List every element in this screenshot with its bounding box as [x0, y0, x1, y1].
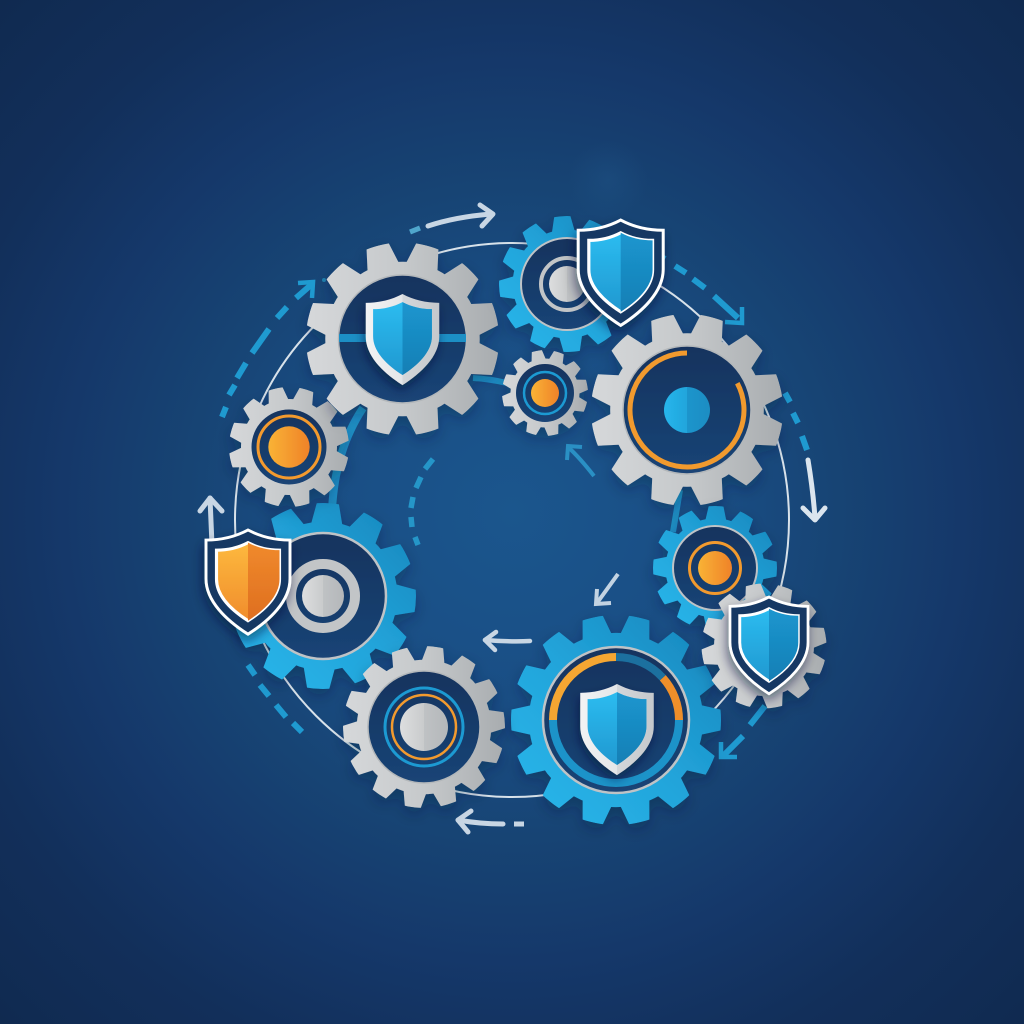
shield frame — [366, 294, 439, 385]
blue segment bottom — [553, 720, 679, 783]
silver ring — [541, 258, 593, 310]
connector arcs between gears — [332, 378, 680, 532]
shield outline — [206, 530, 290, 634]
gear teeth — [498, 216, 612, 359]
arrow: top clockwise — [410, 205, 493, 232]
thin orbit ring — [235, 243, 789, 797]
shield face — [588, 692, 646, 765]
orange disc — [531, 379, 559, 407]
orange disc — [268, 426, 310, 468]
shield: orange on left blue gear — [206, 530, 290, 634]
background glow — [568, 140, 648, 220]
orange segment left — [553, 657, 616, 720]
arrow: upper right dashed — [660, 256, 742, 323]
centre disc — [549, 266, 585, 302]
connector: right gear to right blue gear — [673, 490, 680, 532]
shield face — [216, 543, 280, 621]
connector: top gear to small gear — [473, 378, 507, 383]
shield: lower-right gray gear — [730, 597, 808, 694]
shield face — [740, 609, 798, 681]
arrow: right side downward — [785, 393, 825, 520]
gear hub — [516, 364, 574, 422]
gear: right large gray gear — [591, 314, 783, 506]
blue ring — [524, 372, 566, 414]
gear hub — [521, 238, 613, 330]
gear teeth — [343, 646, 505, 808]
centre disc — [400, 703, 448, 751]
shield: bottom blue gear — [580, 684, 654, 775]
silver ring — [291, 564, 355, 628]
arrow: left upward — [200, 498, 222, 545]
gear: right blue gear — [653, 506, 777, 630]
connector: top gear to left blue gear — [332, 408, 363, 510]
gear teeth — [230, 503, 416, 689]
gear teeth — [306, 242, 499, 436]
blue disc — [664, 387, 710, 433]
gear teeth — [229, 387, 349, 507]
gear: bottom large blue gear — [511, 615, 721, 825]
gear hub — [623, 346, 751, 474]
orange segment right — [663, 678, 679, 720]
orange progress arc — [630, 353, 744, 467]
inner dashed arc — [411, 459, 433, 545]
blue ring — [385, 688, 463, 766]
gear teeth — [702, 584, 826, 708]
gear: left blue gear with rings — [230, 503, 416, 689]
shield frame — [580, 684, 654, 775]
inner arrow: lower centre — [596, 574, 618, 604]
gear: top-left large gray gear — [306, 242, 499, 436]
shield face — [589, 233, 653, 312]
arrow: upper left dashed — [222, 278, 326, 417]
orange ring — [690, 542, 740, 594]
gear: lower-right gray gear — [702, 584, 826, 708]
orange disc — [698, 551, 732, 585]
gear: top blue gear — [498, 216, 614, 359]
gear: small centre gray gear — [502, 350, 588, 436]
gear: left small gray gear — [229, 387, 349, 507]
shield: top-left gear — [366, 294, 439, 385]
arrow: bottom leftward — [458, 811, 524, 832]
shield face — [373, 302, 432, 375]
gear hub — [338, 275, 466, 403]
shield outline — [578, 220, 663, 325]
gear: lower-left gray gear — [343, 646, 505, 808]
dim blue segment top — [616, 657, 663, 678]
inner arrow: toward small gear — [567, 446, 594, 476]
gear hub — [543, 647, 689, 793]
gear teeth — [653, 506, 777, 630]
orange ring — [258, 416, 320, 478]
shield outline — [730, 597, 808, 694]
blue axle bar — [339, 334, 466, 342]
gear hub — [673, 526, 757, 610]
arrow: lower right dashed — [721, 706, 765, 757]
progress ring — [553, 657, 679, 783]
gear teeth — [511, 615, 721, 825]
gear teeth — [502, 350, 588, 436]
gear hub — [252, 410, 326, 484]
arrow: lower left dashed — [248, 665, 302, 732]
orange ring — [392, 695, 456, 759]
gear teeth — [591, 314, 783, 506]
inner arrow: leftward — [485, 632, 530, 650]
centre disc — [302, 575, 344, 617]
gear hub — [368, 671, 480, 783]
shield: top blue gear — [578, 220, 663, 325]
gear hub — [260, 533, 386, 659]
